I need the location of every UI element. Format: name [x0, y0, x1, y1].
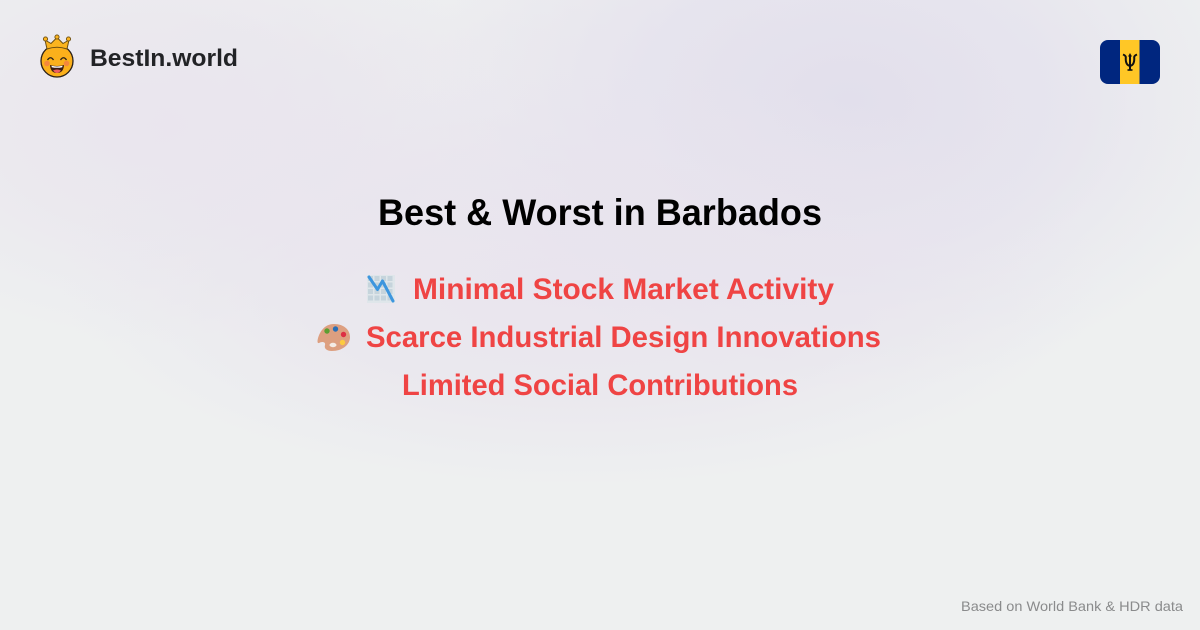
logo: [41, 35, 238, 77]
icon: Barbados flag: [1100, 40, 1160, 84]
item text: Scarce Industrial Design Innovations: [366, 321, 881, 354]
logo text: BestIn.world: [90, 45, 238, 72]
item: stock market: [367, 273, 834, 306]
footer source note: Based on World Bank & HDR data: [961, 598, 1183, 614]
icon: artist palette: [318, 324, 350, 351]
item: industrial design: [318, 321, 881, 354]
item text: Minimal Stock Market Activity: [413, 273, 834, 306]
list of items: [318, 273, 881, 402]
title: Best & Worst in Barbados: [378, 192, 822, 233]
icon: falling chart: [367, 275, 395, 303]
item: social contributions: Limited Social Contributions: [402, 369, 798, 402]
icon: crowned smiley: [41, 35, 73, 77]
